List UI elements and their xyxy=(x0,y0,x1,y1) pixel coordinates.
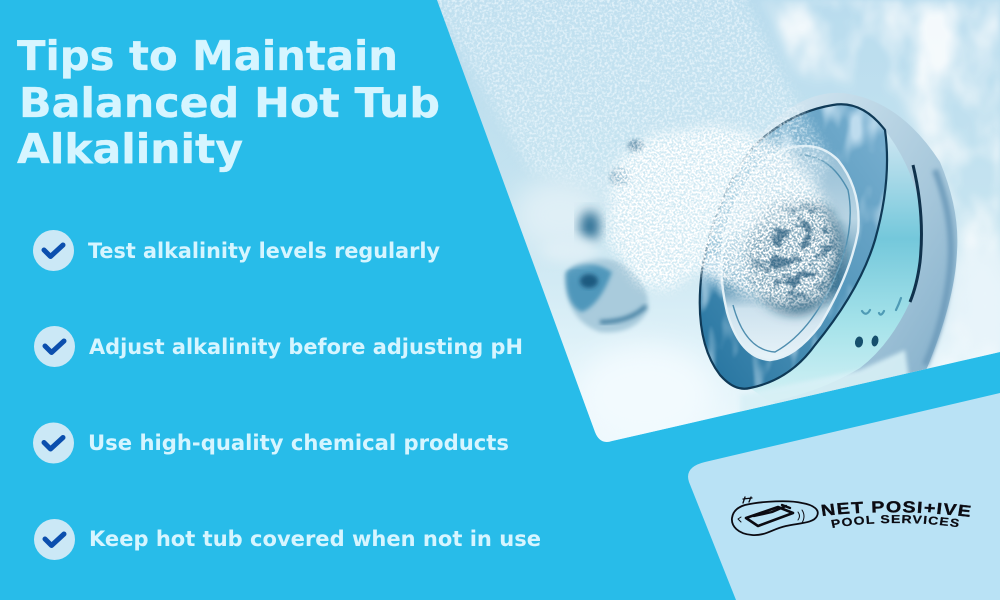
dark spots behind bubbles xyxy=(610,140,644,186)
logo wordmark line 2: POOL SERVICES xyxy=(831,515,959,528)
title: Balanced Hot Tub xyxy=(19,79,440,127)
inner dome xyxy=(722,147,858,359)
title: Tips to Maintain xyxy=(17,32,398,80)
glass ring xyxy=(760,93,957,418)
small holes xyxy=(855,336,863,348)
logo wordmark line 1: NET POSI+IVE xyxy=(821,501,971,517)
bubble cloud xyxy=(437,0,834,252)
tip 3: Use high-quality chemical products xyxy=(88,431,509,456)
second jet xyxy=(565,258,648,332)
logo panel xyxy=(688,393,1000,600)
blue lens xyxy=(700,105,886,388)
logo: Net Positive Pool Services xyxy=(731,496,971,536)
tip 1: Test alkalinity levels regularly xyxy=(88,239,440,264)
tip 4: Keep hot tub covered when not in use xyxy=(89,527,541,552)
dark gaps in dense bubbles xyxy=(746,199,840,304)
tip 4 xyxy=(34,519,541,560)
teal interior xyxy=(750,130,922,402)
tip 2 xyxy=(34,326,523,367)
tip 3 xyxy=(33,422,509,464)
title xyxy=(17,32,440,173)
icon: pool outline with lounger xyxy=(732,497,818,535)
tip 1 xyxy=(33,230,440,271)
main jet xyxy=(698,93,958,412)
photo: hot tub jets with bubbles xyxy=(430,0,1000,450)
white fog over second jet xyxy=(512,177,608,253)
title: Alkalinity xyxy=(17,125,243,173)
dense bubbles xyxy=(600,120,848,315)
tip 2: Adjust alkalinity before adjusting pH xyxy=(89,335,523,360)
